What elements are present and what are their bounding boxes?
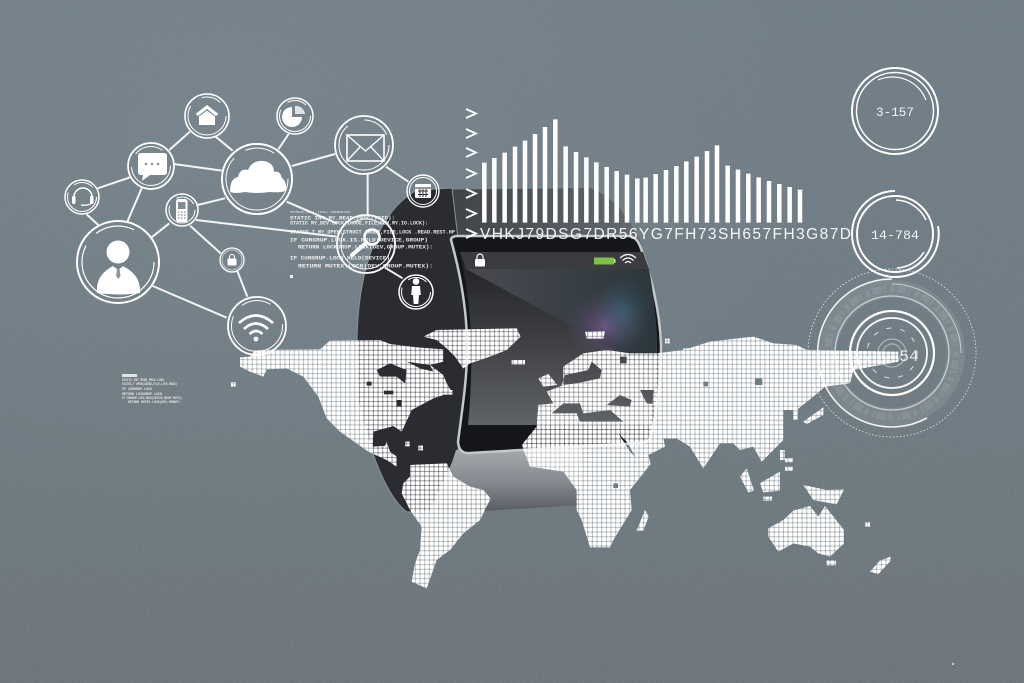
node: headset (65, 180, 99, 214)
node: calendar (407, 175, 439, 207)
watch drum left side (357, 188, 470, 512)
node: cloud (222, 144, 292, 214)
code text block: STATIC INT MY_READ_PROC(VOID): (290, 216, 395, 222)
watch band top (417, 188, 642, 245)
code text block: RETURN LOCKGRUP.LOCK(DEV,GROUP.MUTEX): (298, 244, 433, 250)
small speck (952, 663, 954, 665)
node: user (77, 221, 159, 303)
small side text block: IF CURGRUP.LOCK.HELD(DEVICE,GROUP.MUTEX) (122, 396, 182, 401)
node: wifi (228, 297, 286, 355)
icon: status lock (475, 254, 485, 266)
code text block: RETURN MUTEX.LOCK(DEV,GROUP.MUTEX): (298, 264, 433, 270)
node: search (337, 215, 395, 273)
node: chat (128, 143, 174, 189)
node: pie chart (277, 98, 313, 134)
node: person (399, 275, 433, 309)
smart watch device (357, 188, 661, 512)
gauge: 14-784 (852, 191, 939, 277)
code text block: IF CURGRUP.LOCK.HELD(DEVICE) (290, 256, 390, 262)
screen display (460, 252, 657, 425)
node: home (185, 94, 229, 138)
network diagram (65, 94, 439, 355)
bar chart (484, 119, 800, 223)
code text block: IF CURGRUP.LOCK.IS.HELD(DEVICE,GROUP) (290, 238, 428, 244)
code text block: STATIC MY_DEV.LOCK(INODE,FILE,SEM,MY.IO.LOCK): (290, 220, 428, 226)
radar target gauge (808, 269, 976, 437)
small side text block (122, 374, 182, 405)
icon: battery (594, 258, 616, 264)
node: phone (166, 194, 198, 226)
code text block: MYMEM.NET TEST.HANDLER (290, 211, 351, 215)
small side text block: STATUS_T OPEN(INODE,FILE,LOCK.READ) (122, 382, 177, 387)
radar target gauge: 54 (899, 348, 919, 366)
world map dotted (230, 320, 910, 600)
small side text block: RETURN LOCKGRUP.LOCK (122, 393, 163, 397)
screen body (451, 236, 661, 453)
node: mail (335, 116, 393, 174)
code text block: STATUS_T MY_OPEN(STRUCT INODE,FILE,LOCK .READ.REST.HP (290, 230, 455, 236)
gauge: 3-157: 3-157 (876, 105, 914, 120)
bar chart labels: VHKJ79DSG7DR56YG7FH73SH657FH3G87D (480, 226, 851, 243)
code text block (290, 211, 455, 278)
chevrons column (466, 109, 476, 238)
gauge: 14-784: 14-784 (871, 228, 919, 243)
watch band lower (436, 444, 582, 512)
node: lock (220, 248, 244, 272)
icon: status wifi (620, 254, 636, 263)
small side text block: RETURN MUTEX.LOCK(DEV,GROUP) (128, 400, 180, 405)
connecting lines (87, 132, 408, 318)
gauge: 3-157 (852, 68, 938, 154)
small side text block: STATIC INT READ_PROC.LOCK (122, 379, 165, 383)
small side text block: IF CURGRUP.LOCK (122, 388, 153, 392)
status bar (460, 252, 649, 269)
